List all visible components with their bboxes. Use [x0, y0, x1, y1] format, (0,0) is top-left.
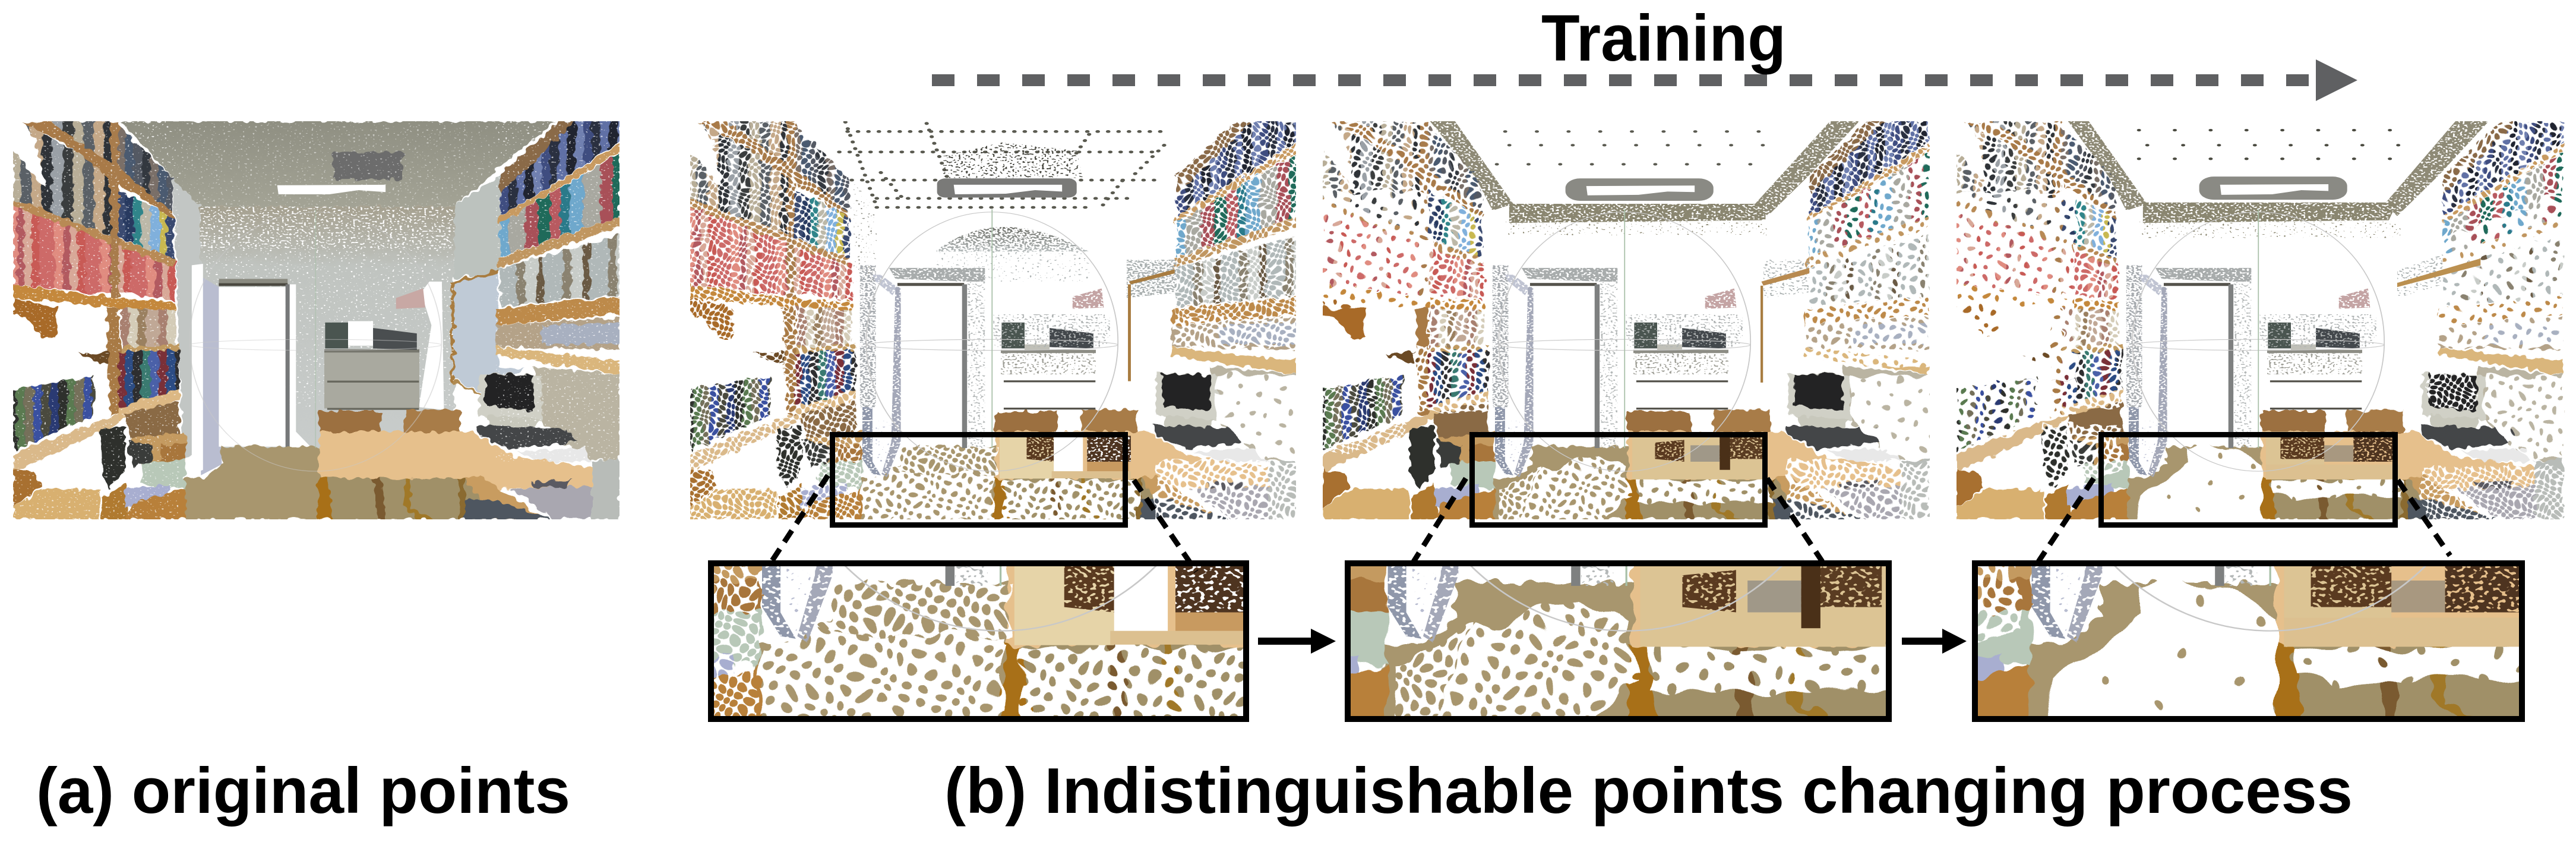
panel: original points — [13, 121, 620, 519]
zoom frames and connectors, stage 1 — [711, 435, 1246, 719]
panel: training stage 1 — [685, 118, 1302, 522]
inset: zoomed floor stage 3 — [1978, 566, 2519, 716]
point sparsity mask, stage 1 — [685, 118, 1302, 522]
zoom frames and connectors, stage 3 — [1975, 435, 2522, 719]
arrow: training direction — [932, 59, 2357, 101]
panel: training stage 2 — [1317, 118, 1935, 522]
point sparsity mask, stage 3 — [1951, 118, 2568, 522]
heading: Training: Training — [1541, 2, 1786, 75]
arrow: inset 2 to inset 3 — [1902, 629, 1967, 654]
ceiling band and walls, stage 2 — [1430, 121, 1859, 480]
zoom frames and connectors, stage 2 — [1348, 435, 1889, 719]
panel: training stage 3 — [1951, 118, 2568, 522]
ceiling band and walls, stage 3 — [2068, 121, 2489, 480]
caption: original points: (a) original points — [36, 755, 570, 827]
ceiling and wall points, stage 1 — [839, 122, 1177, 478]
inset: zoomed floor stage 2 — [1351, 566, 1886, 716]
inset: zoomed floor stage 1 — [714, 566, 1243, 716]
caption: changing process: (b) Indistinguishable points changing process — [944, 755, 2353, 827]
point sparsity mask, stage 2 — [1317, 118, 1935, 522]
arrow: inset 1 to inset 2 — [1258, 629, 1336, 654]
